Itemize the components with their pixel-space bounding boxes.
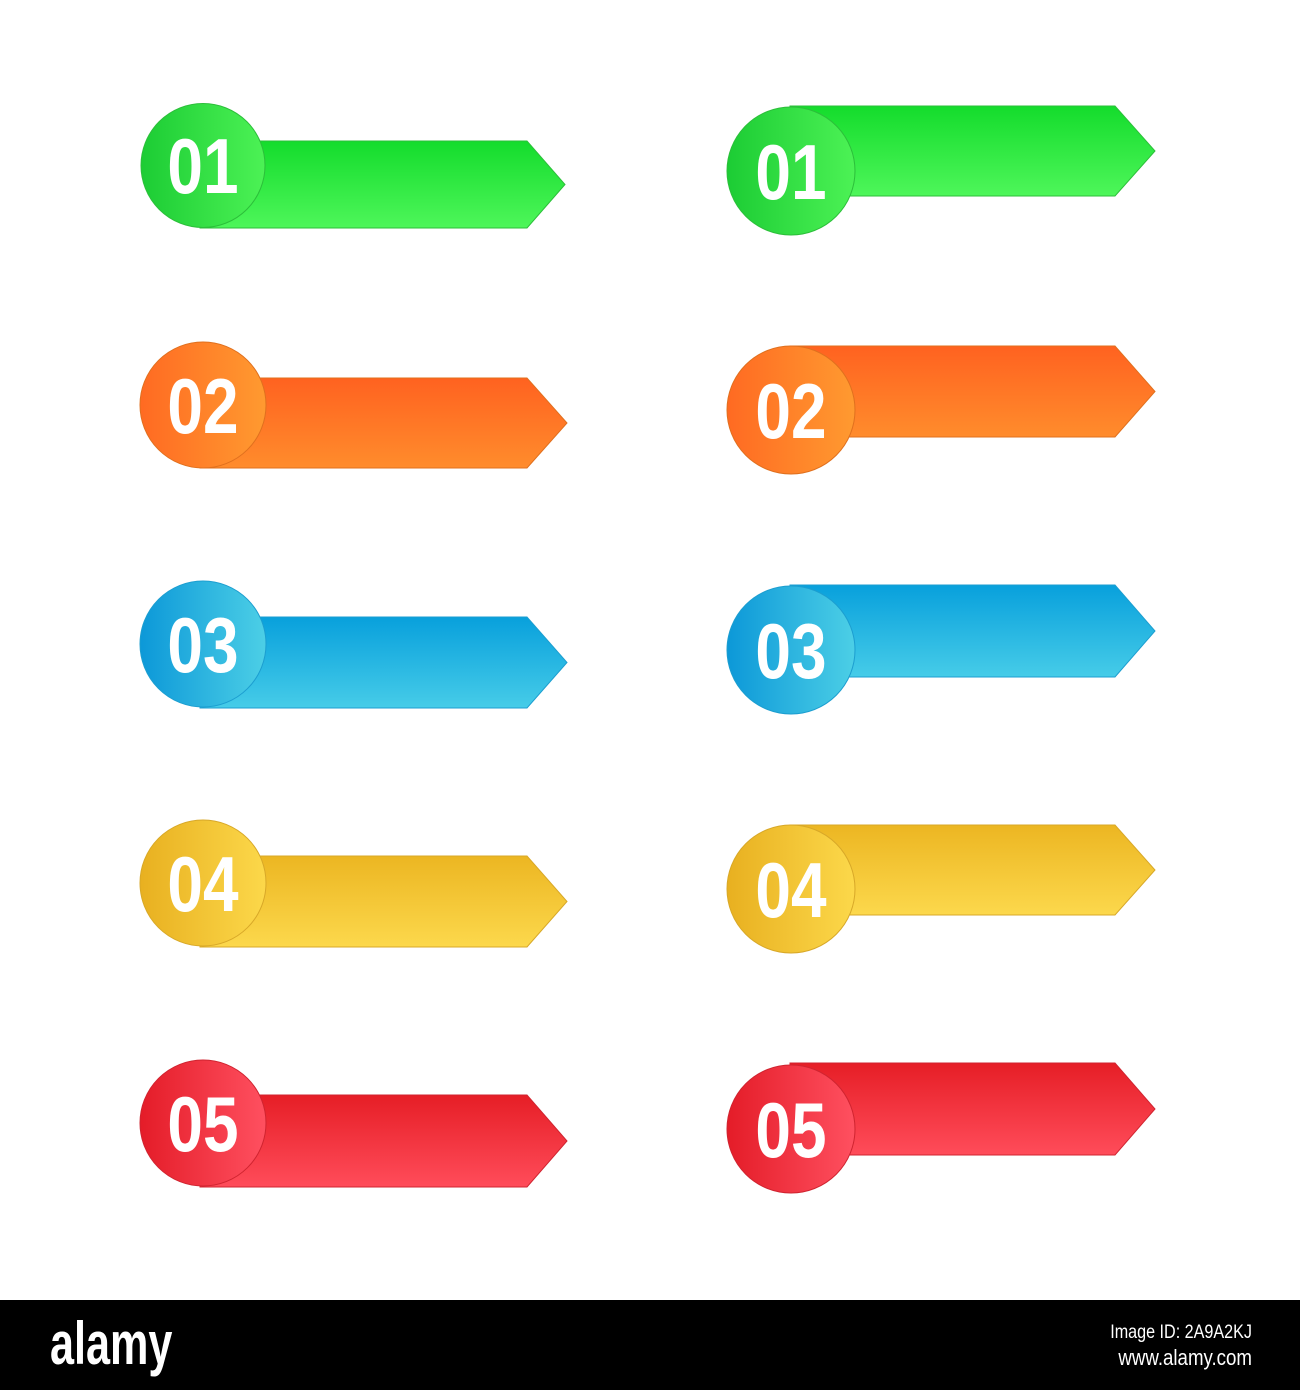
tag: left 02: 02 xyxy=(167,363,239,450)
tag: right 02 xyxy=(727,346,1155,474)
tag: right 03 xyxy=(727,585,1155,714)
tag: left 01: 01 xyxy=(167,123,239,210)
tag: left 03: 03 xyxy=(167,602,239,689)
tag: right 01 xyxy=(727,106,1155,235)
tag: right 04: 04 xyxy=(755,847,827,934)
footer url: www.alamy.com xyxy=(1117,1347,1252,1370)
tag: left 05: 05 xyxy=(167,1081,239,1168)
footer logo: alamy xyxy=(50,1311,172,1378)
tag: right 02: 02 xyxy=(755,368,827,455)
footer id: Image ID: 2A9A2KJ xyxy=(1110,1321,1252,1342)
tag: right 01: 01 xyxy=(755,129,827,216)
tag: left 02 xyxy=(140,342,567,468)
tag: left 04 xyxy=(140,820,567,947)
tag: right 05: 05 xyxy=(755,1087,827,1174)
tag: right 04 xyxy=(727,825,1155,953)
tag: left 03 xyxy=(140,581,567,708)
tag: right 05 xyxy=(727,1063,1155,1193)
footer bar xyxy=(0,1300,1300,1390)
tag: left 01 xyxy=(141,104,565,228)
tag: right 03: 03 xyxy=(755,608,827,695)
tag: left 05 xyxy=(140,1060,567,1187)
tag: left 04: 04 xyxy=(167,841,239,928)
